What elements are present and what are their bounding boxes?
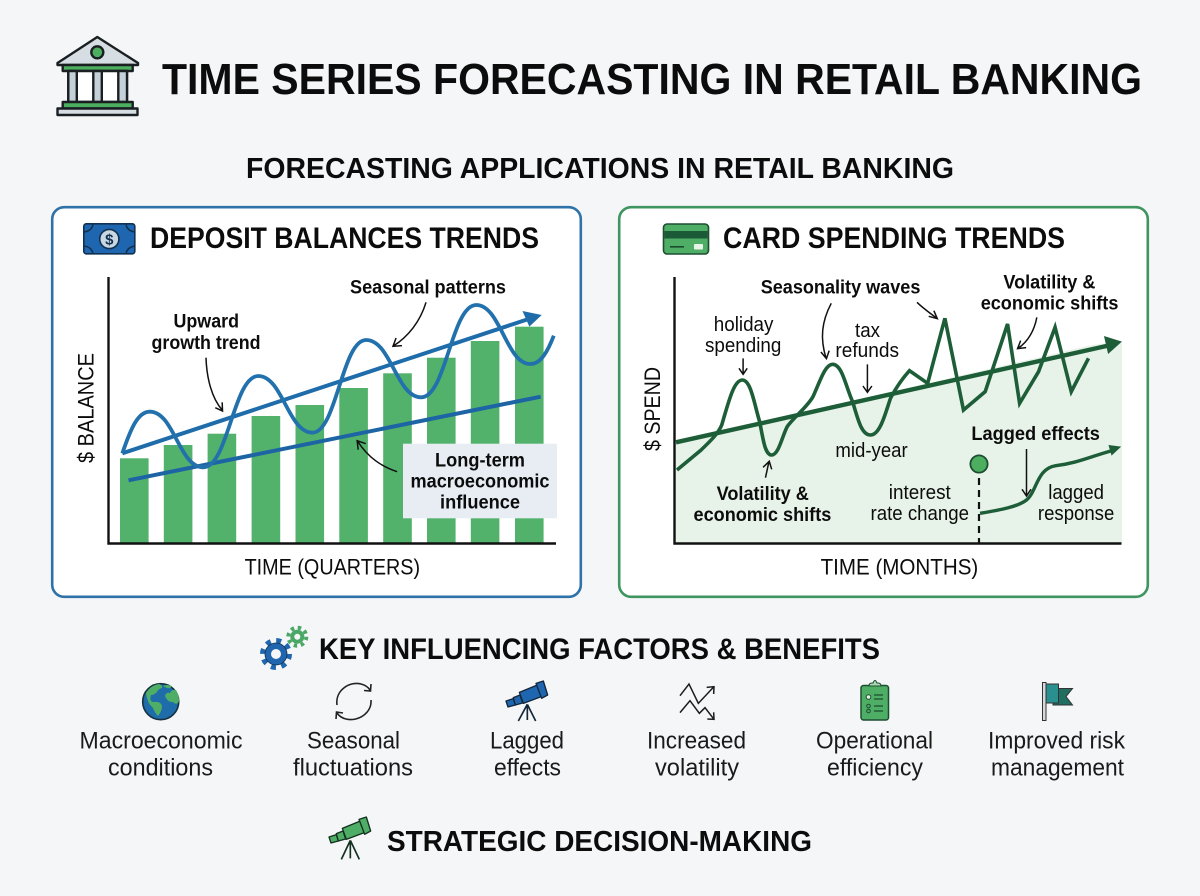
icon: clipboard (861, 680, 888, 720)
factor label: Increased (647, 728, 746, 754)
label: mid-year: mid-year (835, 440, 908, 462)
trend line: spend (676, 336, 1122, 442)
panel: deposit balances trends (52, 207, 581, 597)
label: upward growth trend: Upward (174, 312, 239, 333)
chart axes (674, 277, 1122, 544)
label: volatility bottom: Volatility & (717, 484, 809, 505)
callout: long-term macroeconomic influence (403, 444, 557, 518)
factor label (647, 728, 746, 782)
label: seasonality waves: Seasonality waves (761, 278, 920, 298)
factor label (80, 728, 242, 782)
heading: forecasting applications: FORECASTING APPLICATIONS IN RETAIL BANKING (246, 153, 954, 185)
label: volatility top (981, 272, 1118, 314)
y axis label: balance: $ BALANCE (74, 353, 98, 463)
panel heading: deposit: DEPOSIT BALANCES TRENDS (150, 222, 539, 255)
callout: long-term macroeconomic influence: influence (440, 492, 520, 514)
label: interest rate change: interest (889, 482, 951, 504)
title: TIME SERIES FORECASTING IN RETAIL BANKING (162, 55, 1142, 104)
panel heading: card: CARD SPENDING TRENDS (723, 222, 1065, 255)
heading: strategic decision-making: STRATEGIC DECISION-MAKING (387, 826, 812, 858)
label: interest rate change: rate change (870, 503, 969, 525)
x axis label: months: TIME (MONTHS) (821, 554, 978, 580)
label: tax refunds: tax (855, 320, 880, 342)
x axis label: quarters: TIME (QUARTERS) (245, 554, 420, 580)
chart axes (108, 277, 556, 544)
label: volatility bottom: economic shifts (694, 505, 831, 526)
label: lagged effects: Lagged effects (971, 424, 1100, 445)
icon: blue telescope (506, 681, 548, 721)
callout: long-term macroeconomic influence: macroeconomic (410, 472, 550, 493)
trend line: long-term macroeconomic (129, 397, 541, 480)
factor label (293, 728, 413, 782)
factor label (816, 728, 933, 782)
label: volatility bottom (694, 484, 831, 526)
icon: bank building (58, 37, 138, 115)
label: lagged response: response (1038, 503, 1114, 525)
marker: interest rate change (970, 455, 988, 543)
icon: green telescope (329, 817, 371, 859)
area fill under trend (674, 341, 1122, 543)
label: volatility top: Volatility & (1003, 272, 1096, 294)
annotation arrows: deposit (206, 302, 426, 472)
label: tax refunds: refunds (835, 340, 899, 362)
label: seasonal patterns: Seasonal patterns (350, 278, 506, 298)
icon: credit card (664, 224, 708, 254)
label: upward growth trend: growth trend (152, 333, 260, 354)
trend line: upward growth (122, 311, 542, 453)
label: tax refunds (835, 320, 899, 362)
factor label: efficiency (827, 754, 923, 782)
y axis label: spend: $ SPEND (640, 367, 665, 451)
label: lagged response: lagged (1048, 482, 1104, 504)
label: holiday spending: spending (705, 335, 781, 357)
label: upward growth trend (152, 312, 260, 354)
factor label (988, 728, 1126, 782)
bar chart: balances (120, 327, 544, 544)
label: holiday spending (705, 314, 781, 357)
factor: seasonal fluctuations (293, 683, 413, 782)
factor: lagged effects (490, 681, 564, 782)
icon: globe (143, 684, 179, 720)
annotation arrows: card (739, 302, 1037, 496)
factor label: Improved risk (988, 728, 1126, 754)
heading: key influencing factors: KEY INFLUENCING FACTORS & BENEFITS (319, 633, 880, 666)
icon: banknote (84, 224, 135, 254)
factor label: volatility (655, 754, 739, 782)
seasonal wave line (122, 305, 554, 467)
factor label: Operational (816, 728, 933, 754)
lagged response line (980, 445, 1121, 513)
factor label: Lagged (490, 728, 564, 754)
factor label: Seasonal (307, 728, 400, 754)
icon: flag (1042, 682, 1072, 720)
icon: refresh arrows (336, 683, 371, 720)
callout: long-term macroeconomic influence: Long-term (435, 451, 525, 472)
factor label: management (991, 754, 1124, 782)
factor label (490, 728, 564, 782)
factor label: conditions (108, 754, 213, 782)
icon: gears (262, 628, 306, 668)
factor: increased volatility (647, 684, 746, 782)
factor: improved risk management (988, 682, 1126, 782)
label: interest rate change (870, 482, 969, 525)
icon: banknote: $ (105, 232, 114, 248)
label: volatility top: economic shifts (981, 294, 1118, 314)
factor label: fluctuations (293, 754, 413, 782)
spending volatility line (677, 318, 1088, 470)
factor: macroeconomic conditions (80, 684, 242, 782)
factor label: Macroeconomic (80, 728, 242, 754)
factor: operational efficiency (816, 680, 933, 782)
panel: card spending trends (619, 207, 1148, 597)
factor label: effects (494, 754, 561, 782)
icon: zigzag arrows (680, 684, 714, 719)
label: holiday spending: holiday (714, 314, 773, 336)
label: lagged response (1038, 482, 1114, 525)
